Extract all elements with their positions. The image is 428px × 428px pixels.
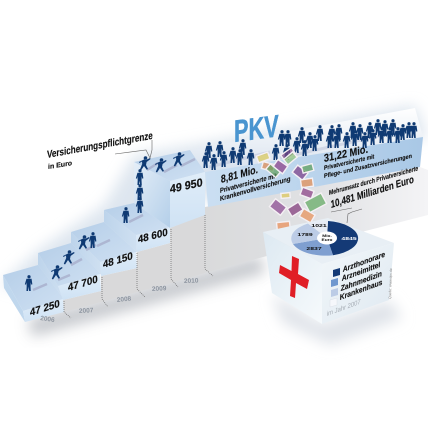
PKV bar — [190, 108, 423, 207]
value 2007: 47 700 — [68, 274, 98, 294]
legend: Arzneimittel — [340, 259, 382, 283]
legend — [330, 249, 386, 307]
pie chart: Mio. — [322, 234, 332, 238]
banknotes falling — [256, 148, 327, 233]
pie chart: Euro — [322, 238, 333, 242]
text: 8,81 Mio.: 8,81 Mio. — [221, 164, 258, 186]
stair: 2009 step — [104, 203, 170, 293]
pie chart: 4845 — [341, 237, 358, 242]
stair: 2007 step — [38, 243, 101, 315]
text: Mehrumsatz: 10,481 Milliarden Euro — [330, 174, 414, 211]
pie chart: 1789 — [297, 233, 313, 238]
text: 31,22 Mio.: Privatversicherte mit — [324, 154, 374, 172]
legend: Arzthonorare — [341, 249, 386, 274]
figures on stairs — [25, 152, 185, 291]
PKV heading: PKV — [234, 109, 279, 149]
pie chart: 2837 — [306, 247, 322, 252]
figure shadows — [33, 128, 415, 290]
grey wall below steps — [63, 167, 428, 312]
pie chart — [291, 221, 358, 256]
value 2009: 48 600 — [138, 227, 168, 246]
text: Mehrumsatz — [329, 165, 419, 223]
heading: Versicherungspflichtgrenze: Versicherungspflichtgrenze — [47, 129, 153, 160]
text: 8,81 Mio.: Krankenvollversicherung — [220, 176, 290, 203]
red cross — [279, 256, 309, 298]
legend: Zahnmedizin — [339, 269, 383, 293]
text: 8,81 Mio.: Privatversicherte mit — [220, 172, 277, 195]
background wall and floor shadow — [0, 105, 428, 345]
stair: 2008 step — [71, 222, 137, 304]
year 2008: 2008 — [116, 295, 132, 304]
crowd of insured people — [202, 119, 417, 170]
pie chart: 1021 — [311, 224, 328, 229]
source note: Quelle: www.dpv.de — [388, 268, 393, 299]
heading: Versicherungspflichtgrenze: in Euro — [48, 160, 73, 171]
stair: 2010 tall step — [134, 150, 205, 285]
year note: im Jahr 2007 — [326, 298, 361, 318]
text: Mehrumsatz: Mehrumsatz durch Privatversicherte — [329, 165, 419, 197]
text: 31,22 Mio.: 31,22 Mio. — [324, 144, 368, 165]
year 2007: 2007 — [79, 307, 94, 315]
text: 31,22 Mio.: Pflege- und Zusatzversicherungen — [324, 153, 412, 180]
dotted year lines — [64, 215, 213, 318]
value 2010: 49 950 — [170, 177, 203, 196]
stair: 2006 step — [3, 265, 64, 324]
value 2008: 48 150 — [103, 251, 133, 271]
year 2009: 2009 — [152, 285, 167, 293]
health cube — [263, 218, 394, 324]
legend: Krankenhaus — [339, 277, 383, 302]
value 2006: 47 250 — [30, 299, 60, 319]
year 2010: 2010 — [184, 277, 199, 285]
year 2006: 2006 — [40, 315, 55, 324]
